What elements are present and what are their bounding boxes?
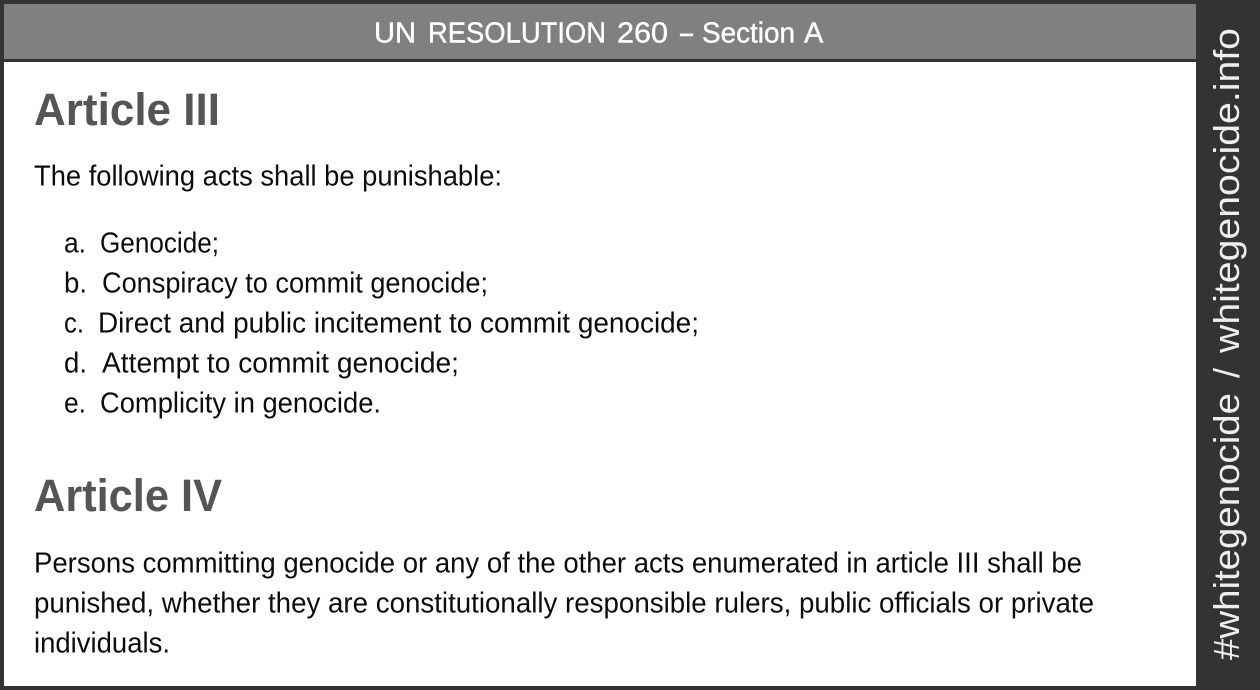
list: punishable acts: d. <box>64 348 87 380</box>
header title: Section <box>702 18 795 50</box>
header title: UN <box>374 18 416 50</box>
header title: 260 <box>617 18 668 50</box>
sidebar hashtag and website <box>1206 28 1247 660</box>
text block: Article IV body: individuals. <box>34 628 170 660</box>
text block: Article IV body <box>34 548 1094 660</box>
text block: Article III intro: The following acts shall be punishable: <box>34 160 502 192</box>
list: punishable acts: b. <box>64 268 87 300</box>
list: punishable acts: Conspiracy to commit genocide; <box>102 268 488 300</box>
header title: A <box>804 18 824 50</box>
list: punishable acts: Genocide; <box>100 228 219 260</box>
list: punishable acts: Direct and public incitement to commit genocide; <box>98 308 699 340</box>
list: punishable acts: e. <box>64 388 86 420</box>
sidebar hashtag and website: whitegenocide.info <box>1206 28 1247 354</box>
header title: RESOLUTION <box>428 18 606 50</box>
sidebar hashtag and website: / <box>1206 368 1247 378</box>
list: punishable acts: Attempt to commit genocide; <box>102 348 459 380</box>
heading: Article IV: Article IV <box>34 470 222 521</box>
list: punishable acts: Complicity in genocide. <box>100 388 381 420</box>
header bar <box>4 4 1196 59</box>
list: punishable acts <box>64 228 699 420</box>
sidebar hashtag and website: #whitegenocide <box>1206 393 1247 660</box>
list: punishable acts: a. <box>64 228 86 260</box>
list: punishable acts: c. <box>64 308 84 340</box>
header title: - <box>678 18 695 50</box>
text block: Article IV body: punished, whether they are constitutionally responsible rulers, public officials or private <box>34 588 1094 620</box>
text block: Article IV body: Persons committing genocide or any of the other acts enumerated in article III shall be <box>34 548 1082 580</box>
heading: Article III: Article III <box>34 84 220 135</box>
header title <box>374 18 824 50</box>
